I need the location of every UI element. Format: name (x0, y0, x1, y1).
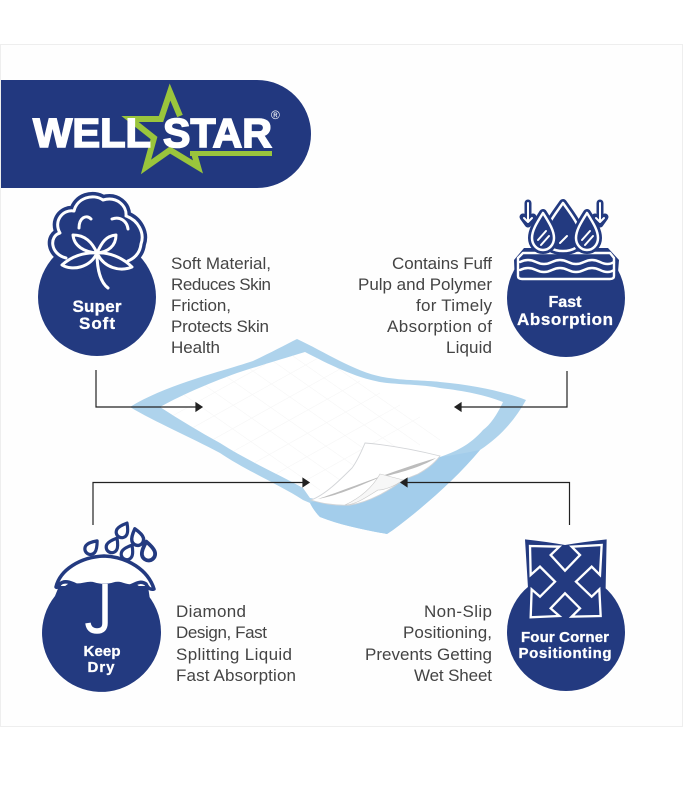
label: super soft: Super (72, 297, 122, 316)
text: fast absorption description: Pulp and Polymer (358, 275, 492, 294)
icon: absorption (514, 203, 619, 284)
text: keep dry description: Fast Absorption (176, 666, 296, 685)
arrow: keep dry to pad (93, 478, 309, 525)
logo wordmark: ® (271, 108, 280, 122)
text: fast absorption description: for Timely (416, 296, 492, 315)
text: keep dry description (176, 602, 296, 685)
product: underpad (130, 335, 526, 534)
label: super soft: Soft (79, 314, 115, 333)
label: four corner positioning: Four Corner (521, 629, 609, 646)
label: keep dry: Keep (84, 643, 120, 660)
text: four corner description: Wet Sheet (414, 666, 492, 685)
pad corner fold (311, 443, 440, 505)
text: fast absorption description: Absorption of (387, 317, 492, 336)
logo star (130, 92, 272, 167)
text: super soft description: Reduces Skin (171, 275, 271, 294)
label: fast absorption: Absorption (517, 310, 613, 329)
text: keep dry description: Splitting Liquid (176, 645, 292, 664)
label: four corner positioning: Positionting (518, 645, 612, 662)
text: four corner description: Non-Slip (424, 602, 492, 621)
label: keep dry (84, 643, 120, 676)
arrow: fast absorption to pad (455, 371, 567, 411)
arrow: four corner to pad (401, 478, 570, 525)
text: super soft description: Soft Material, (171, 254, 271, 273)
pad white surface (160, 352, 503, 505)
text: fast absorption description (358, 254, 492, 357)
arrow: super soft to pad (96, 370, 202, 411)
badge: four corner positioning (507, 539, 625, 691)
logo wordmark: WELL (33, 110, 151, 156)
icon: cotton (53, 197, 142, 288)
logo wordmark: STAR (163, 110, 272, 156)
text: fast absorption description: Contains Fuff (392, 254, 492, 273)
label: fast absorption (517, 294, 613, 329)
icon: umbrella (56, 520, 156, 631)
label: four corner positioning (518, 629, 612, 662)
text: keep dry description: Diamond (176, 602, 246, 621)
label: keep dry: Dry (88, 659, 115, 676)
text: fast absorption description: Liquid (446, 338, 492, 357)
badge: super soft (38, 197, 156, 356)
pad blue backing (130, 339, 526, 534)
badge: keep dry (42, 520, 161, 692)
text: super soft description: Protects Skin (171, 317, 269, 336)
badge: fast absorption (507, 203, 625, 357)
logo banner (1, 80, 311, 188)
text: four corner description (365, 602, 492, 685)
text: four corner description: Prevents Getting (365, 645, 492, 664)
text: keep dry description: Design, Fast (176, 623, 267, 642)
text: four corner description: Positioning, (403, 623, 492, 642)
label: super soft (72, 297, 122, 333)
text: super soft description: Health (171, 338, 220, 357)
label: fast absorption: Fast (548, 294, 582, 311)
logo wordmark (33, 108, 280, 156)
text: super soft description: Friction, (171, 296, 231, 315)
text: super soft description (171, 254, 271, 357)
icon: four corner arrows (525, 539, 607, 620)
